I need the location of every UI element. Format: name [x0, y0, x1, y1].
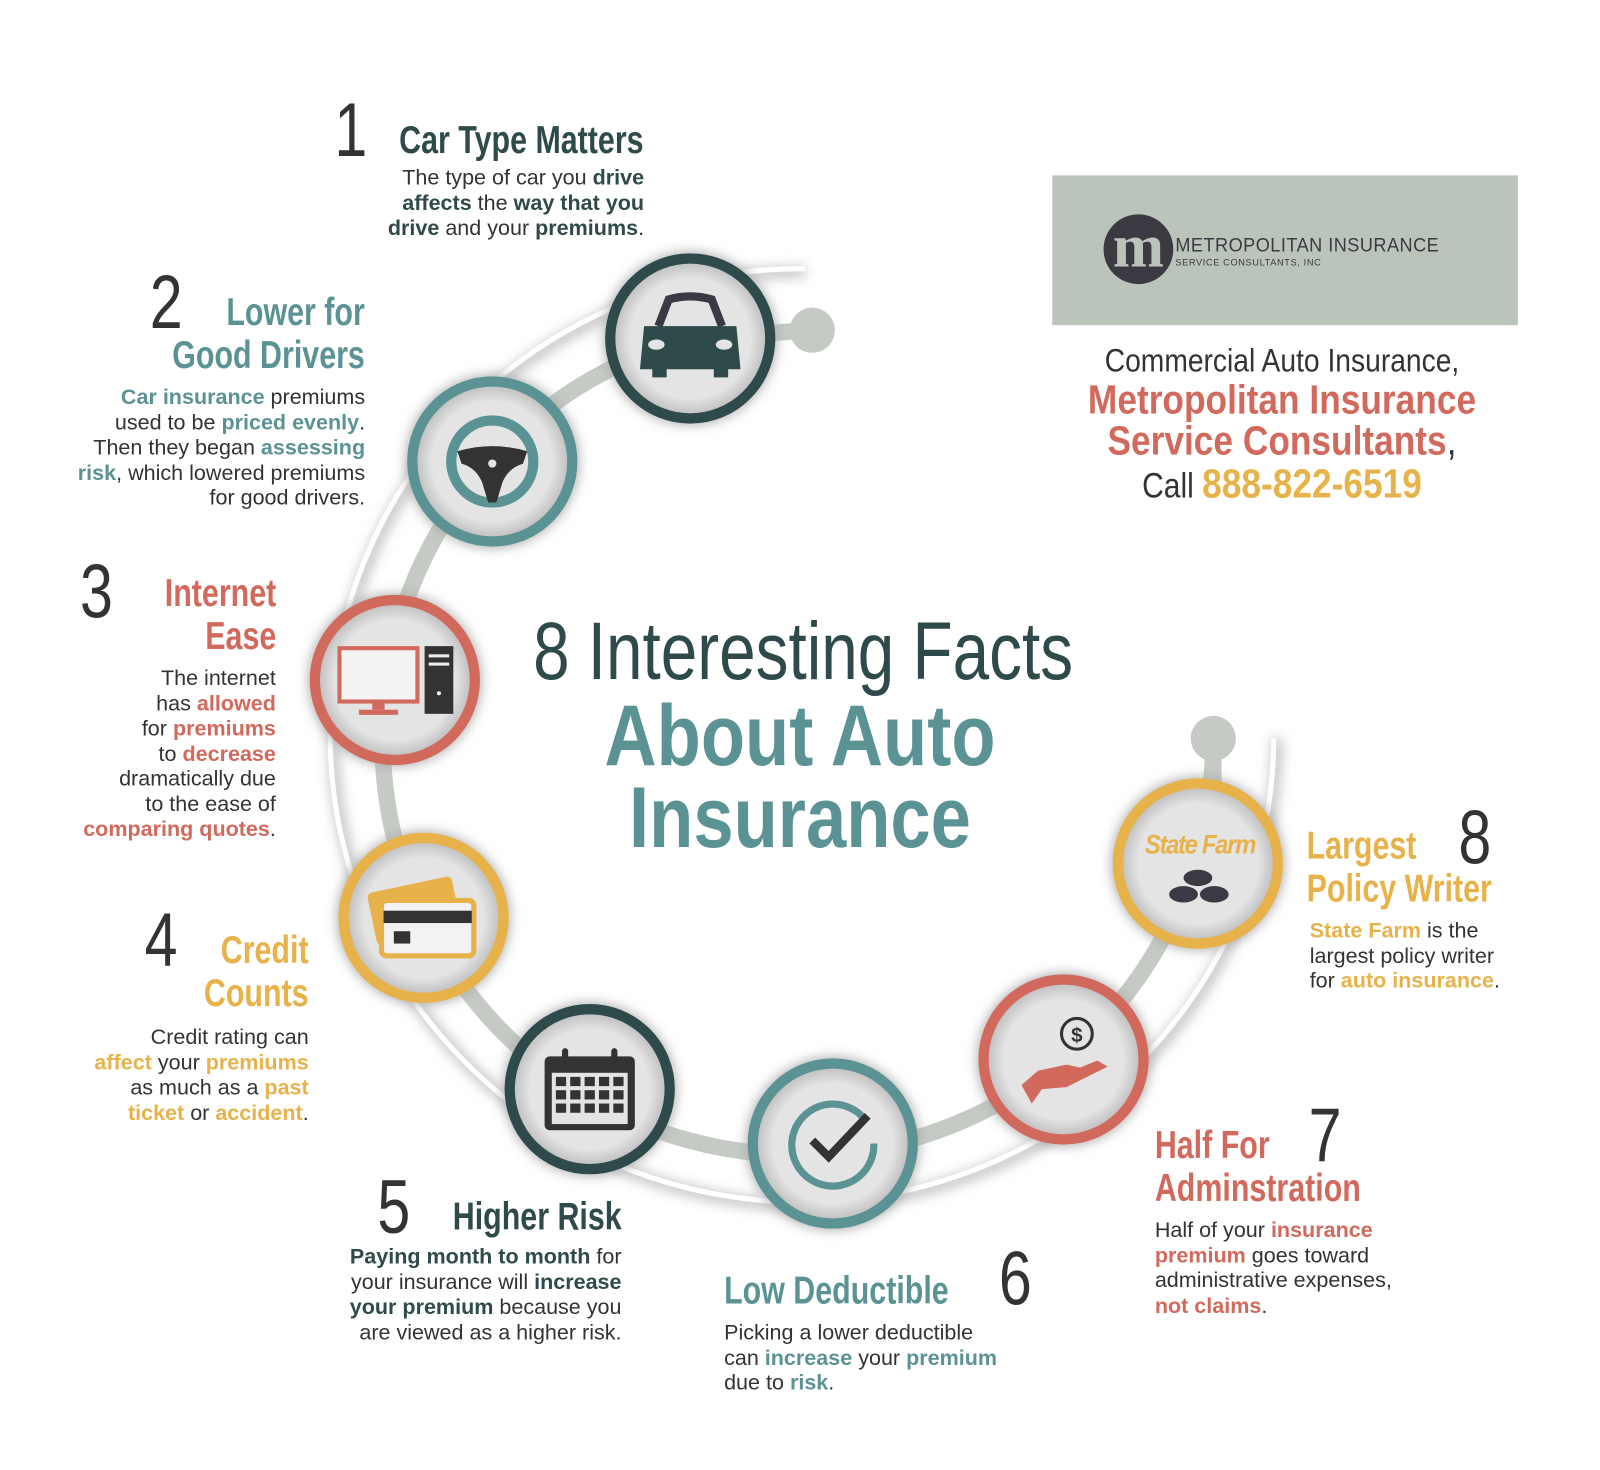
logo panel: METROPOLITAN INSURANCE [1175, 235, 1439, 256]
fact 4: Credit [221, 929, 309, 972]
icon 6 check [747, 1057, 919, 1230]
fact 6: 6 [999, 1236, 1032, 1321]
fact 5 [350, 1164, 622, 1344]
fact 7: administrative expenses, [1155, 1269, 1392, 1292]
fact 5: Paying month to month for [350, 1245, 622, 1269]
fact 7: not claims. [1155, 1294, 1267, 1317]
fact 7: Half For [1155, 1124, 1270, 1167]
fact 2 [78, 259, 365, 510]
fact 6: Low Deductible [724, 1270, 949, 1313]
fact 3: comparing quotes. [83, 817, 276, 841]
fact 3: 3 [80, 549, 113, 634]
fact 8: 8 [1458, 795, 1491, 880]
fact 3: Ease [205, 615, 276, 658]
fact 6: Picking a lower deductible [724, 1321, 973, 1345]
title: 8 Interesting Facts [533, 605, 1073, 696]
fact 8: for auto insurance. [1310, 969, 1500, 993]
fact 5: are viewed as a higher risk. [359, 1320, 622, 1344]
fact 7: Adminstration [1155, 1167, 1361, 1210]
fact 3: dramatically due [119, 767, 276, 791]
fact 4: affect your premiums [94, 1051, 309, 1074]
fact 8: State Farm is the [1310, 919, 1478, 943]
track [383, 330, 1213, 1155]
fact 4: Counts [204, 972, 309, 1015]
icon 3 computer [309, 594, 481, 766]
fact 2: 2 [150, 259, 183, 345]
title: Insurance [629, 769, 971, 866]
fact 5: 5 [377, 1164, 410, 1249]
contact text: Call 888-822-6519 [1142, 462, 1422, 507]
fact 2: risk, which lowered premiums [78, 461, 365, 485]
icon 8 state farm [1112, 738, 1284, 950]
fact 7: 7 [1309, 1092, 1342, 1177]
title [533, 605, 1073, 866]
fact 8: largest policy writer [1310, 944, 1494, 968]
fact 1: The type of car you drive [402, 166, 644, 190]
fact 1: Car Type Matters [400, 119, 644, 162]
fact 1 [334, 87, 644, 240]
contact text: Metropolitan Insurance [1088, 377, 1476, 423]
fact 7 [1155, 1092, 1392, 1317]
contact text: Service Consultants, [1107, 418, 1457, 464]
fact 7: premium goes toward [1155, 1244, 1369, 1267]
fact 2: for good drivers. [209, 486, 365, 510]
fact 6: due to risk. [724, 1371, 834, 1395]
contact text: Commercial Auto Insurance, [1105, 342, 1459, 378]
fact 7: Half of your insurance [1155, 1218, 1373, 1242]
icon 2 steering wheel [406, 375, 578, 548]
logo panel [1052, 175, 1518, 325]
fact 3: to decrease [159, 742, 276, 766]
fact 8: Policy Writer [1307, 868, 1492, 911]
fact 2: used to be priced evenly. [115, 411, 365, 434]
logo panel: SERVICE CONSULTANTS, INC [1175, 257, 1321, 268]
fact 4: as much as a past [130, 1076, 309, 1099]
fact 3: for premiums [142, 717, 276, 740]
fact 4: Credit rating can [151, 1026, 309, 1049]
fact 4 [94, 897, 309, 1125]
title: About Auto [604, 687, 996, 784]
icon 7 hand with coin [977, 973, 1150, 1146]
fact 3: has allowed [156, 692, 276, 715]
fact 6 [724, 1236, 1032, 1395]
fact 2: Then they began assessing [93, 436, 365, 459]
icon 8 state farm: State Farm [1145, 830, 1256, 860]
fact 2: Lower for [227, 291, 365, 334]
icon 5 calendar [504, 1003, 676, 1175]
fact 4: ticket or accident. [128, 1101, 309, 1125]
fact 2: Car insurance premiums [121, 386, 365, 409]
fact 2: Good Drivers [173, 334, 365, 377]
fact 3: Internet [164, 572, 276, 615]
fact 8 [1307, 795, 1500, 993]
fact 3: to the ease of [145, 792, 276, 816]
fact 3: The internet [161, 667, 276, 690]
fact 1: affects the way that you [402, 191, 644, 215]
icon 4 credit card [337, 832, 510, 1004]
icon 7 hand with coin: $ [1071, 1024, 1083, 1047]
icon 1 car [604, 252, 776, 425]
fact 4: 4 [145, 897, 178, 983]
fact 5: your premium because you [350, 1295, 622, 1319]
fact 5: your insurance will increase [351, 1270, 622, 1294]
fact 8: Largest [1307, 825, 1416, 868]
contact text [1088, 342, 1476, 507]
logo panel: m [1113, 212, 1164, 280]
fact 1: drive and your premiums. [388, 216, 644, 240]
fact 3 [80, 549, 276, 841]
fact 1: 1 [334, 87, 367, 172]
fact 6: can increase your premium [724, 1346, 997, 1370]
fact 5: Higher Risk [453, 1196, 622, 1239]
